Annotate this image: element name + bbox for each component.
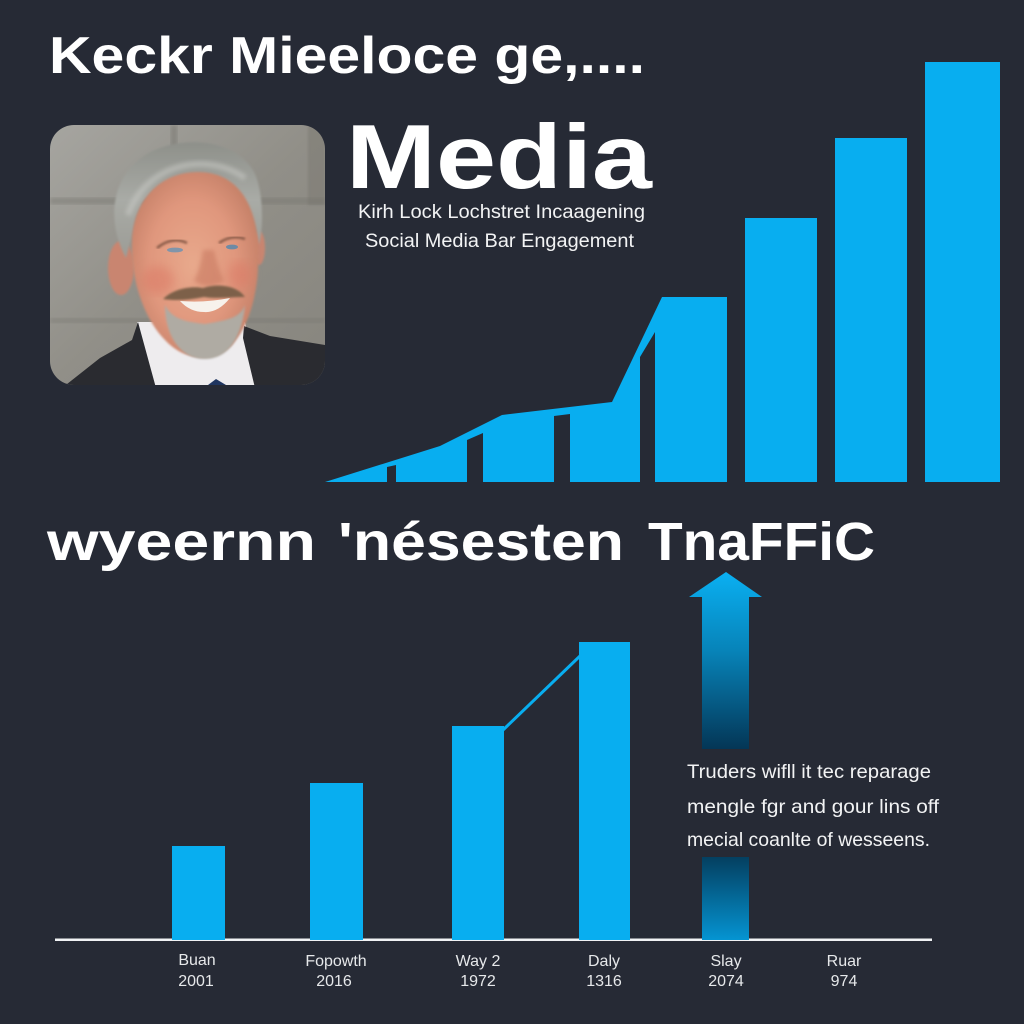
subtitle line one: Kirh Lock Lochstret Incaagening bbox=[358, 202, 645, 223]
moustache bbox=[163, 286, 245, 300]
label 6: Ruar bbox=[827, 953, 862, 970]
media heading: Media bbox=[346, 107, 654, 208]
label 3 bbox=[456, 953, 500, 990]
label 4: Daly bbox=[588, 953, 620, 970]
top bar chart bbox=[325, 62, 1000, 482]
merged rising bars bbox=[325, 297, 727, 482]
nose bbox=[194, 250, 224, 286]
callout line three: mecial coanlte of wesseens. bbox=[687, 829, 930, 851]
eyes bbox=[157, 237, 245, 252]
section heading bbox=[46, 512, 875, 572]
bar 4 bbox=[579, 642, 630, 940]
bar 6 bbox=[835, 138, 907, 482]
axis line bbox=[55, 938, 932, 941]
bar 2 bbox=[310, 783, 363, 940]
ears bbox=[108, 231, 265, 295]
portrait photo bbox=[50, 125, 325, 388]
label 3: 1972 bbox=[460, 973, 496, 990]
label 5: 2074 bbox=[708, 973, 744, 990]
bar 5 faded bbox=[702, 857, 749, 940]
hair highlight bbox=[128, 164, 245, 215]
label 5: Slay bbox=[710, 953, 742, 970]
label 1 bbox=[178, 952, 216, 990]
photo wall backdrop bbox=[50, 125, 325, 385]
section heading: 'nésesten bbox=[338, 512, 624, 572]
smile bbox=[180, 298, 230, 312]
bottom bar chart bbox=[55, 642, 932, 941]
callout text bbox=[687, 761, 940, 851]
bar 5 bbox=[745, 218, 817, 482]
label 4 bbox=[586, 953, 622, 990]
bar 3 bbox=[452, 726, 504, 940]
label 2 bbox=[305, 953, 367, 990]
callout line one: Truders wifll it tec reparage bbox=[687, 761, 931, 783]
section heading: TnaFFiC bbox=[648, 512, 875, 572]
section heading: wyeernn bbox=[46, 512, 316, 572]
label 6 bbox=[827, 953, 862, 990]
title: Keckr Mieeloce ge,.... bbox=[49, 27, 645, 85]
goatee bbox=[165, 305, 245, 359]
label 4: 1316 bbox=[586, 973, 622, 990]
up arrow bbox=[689, 572, 762, 749]
tie bbox=[208, 379, 226, 385]
bar 1 bbox=[172, 846, 225, 940]
label 2: Fopowth bbox=[305, 953, 367, 970]
label 3: Way 2 bbox=[456, 953, 500, 970]
subtitle line two: Social Media Bar Engagement bbox=[365, 231, 635, 252]
bar 7 bbox=[925, 62, 1000, 482]
connector line bbox=[503, 656, 580, 730]
hair bbox=[114, 142, 262, 258]
callout line two: mengle fgr and gour lins off bbox=[687, 796, 940, 818]
suit bbox=[62, 322, 325, 388]
axis labels bbox=[178, 952, 862, 990]
shirt bbox=[137, 322, 258, 385]
label 6: 974 bbox=[831, 973, 857, 990]
label 5 bbox=[708, 953, 744, 990]
label 2: 2016 bbox=[316, 973, 352, 990]
cheek flush bbox=[144, 263, 247, 294]
label 1: Buan bbox=[178, 952, 216, 969]
label 1: 2001 bbox=[178, 973, 214, 990]
face bbox=[132, 172, 258, 357]
